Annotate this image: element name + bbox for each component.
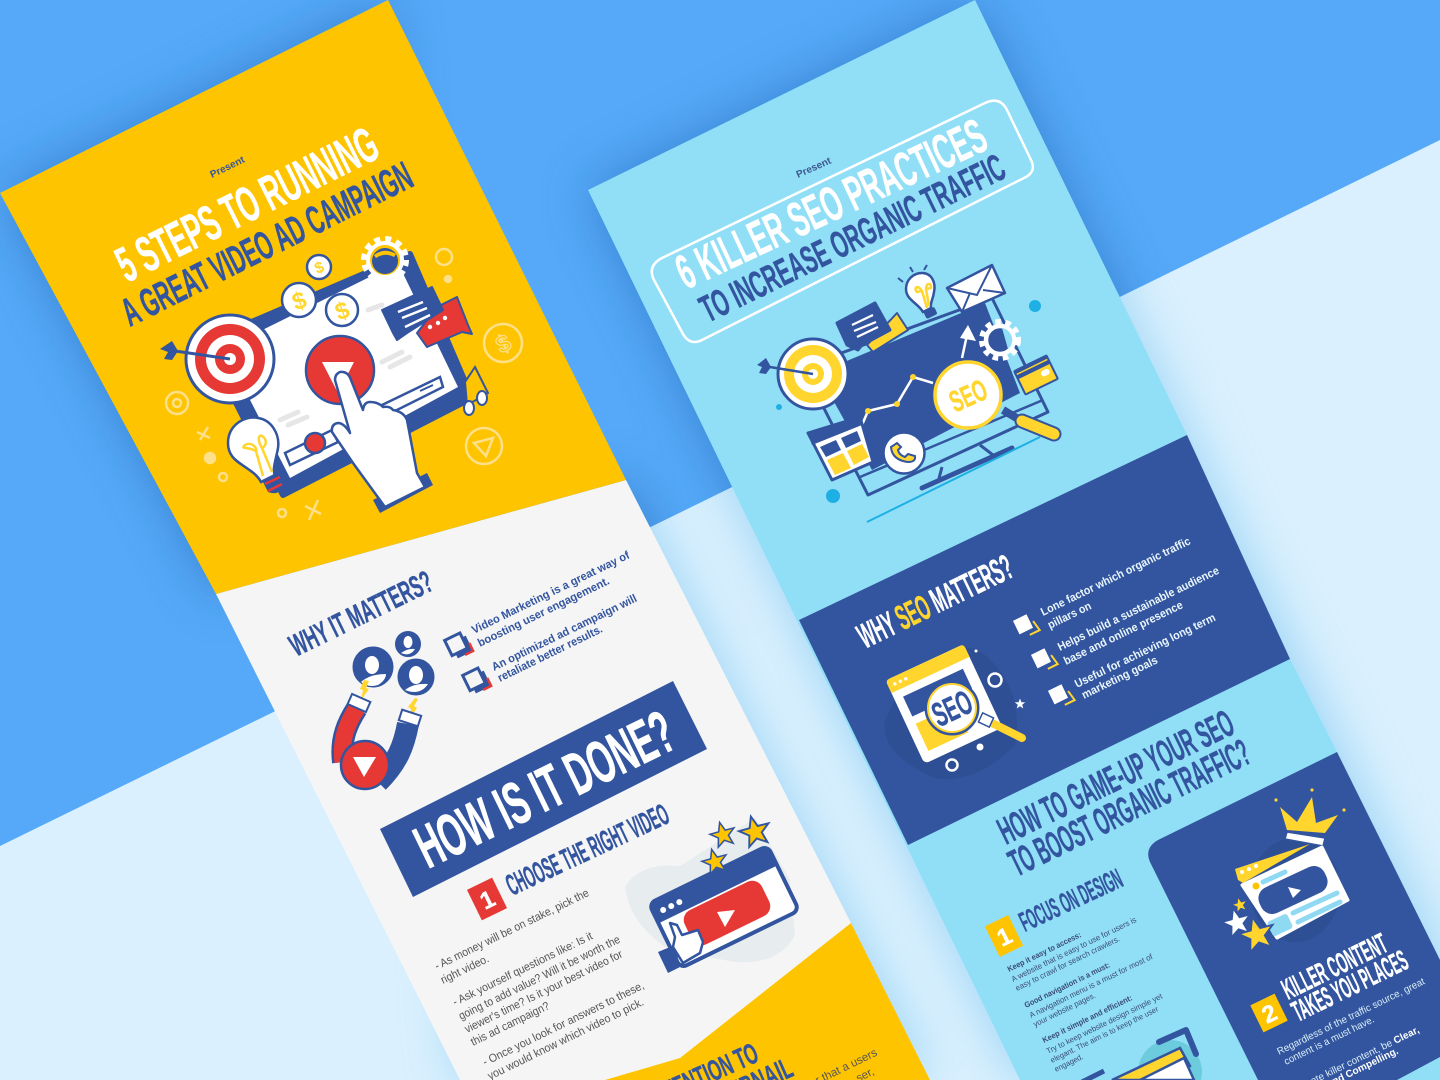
bullet text: Helps build a sustainable audience <box>1056 565 1221 654</box>
banner: how is it done <box>380 681 707 897</box>
icon: phone <box>884 432 924 474</box>
decorative dots <box>776 300 1041 503</box>
icon: video window <box>1235 844 1348 938</box>
icon: gear <box>982 322 1018 358</box>
title line 1: 5 STEPS TO RUNNING <box>107 116 387 293</box>
step 1 body text: - Ask yourself questions like: Is it <box>451 930 595 1009</box>
icon: music note <box>464 367 488 415</box>
bullet text <box>1039 535 1221 702</box>
icon: light bulb <box>898 265 938 319</box>
step 2 number: 2 <box>1258 999 1282 1029</box>
title line 2: A GREAT VIDEO AD CAMPAIGN <box>114 154 420 335</box>
icon: dollar coins: $ <box>332 296 354 326</box>
panel: SEO infographic <box>588 0 1440 1080</box>
title frame and text <box>652 101 1033 342</box>
step 1 body text: Keep it easy to access: <box>1006 930 1083 974</box>
bullet icons <box>1013 612 1075 709</box>
bullet text: Lone factor which organic traffic <box>1039 535 1193 619</box>
illustration: grey placeholder dashes <box>280 305 410 425</box>
label: present: Present <box>208 154 247 181</box>
icon: crown <box>1274 788 1346 846</box>
icon: gear <box>364 239 406 281</box>
step 1 body text: engaged. <box>1053 1052 1085 1074</box>
heading: how to game-up <box>992 703 1257 885</box>
bullet text: boosting user engagement. <box>476 575 612 650</box>
illustration: SEO monitor <box>803 298 1048 522</box>
step 1 body text: - As money will be on stake, pick the <box>433 887 591 973</box>
panel body: light grey sheet <box>216 480 930 1080</box>
panel: yellow header <box>0 0 626 594</box>
bullets: why it matters <box>445 550 639 695</box>
panel body: light blue sheet <box>588 0 1440 1080</box>
icon: pointing hand <box>332 372 433 513</box>
panel: yellow lower section <box>605 923 930 1080</box>
step 1 number: 1 <box>993 922 1017 952</box>
bullet text <box>470 550 639 685</box>
heading: WHY SEO MATTERS? <box>851 547 1020 656</box>
icon: SEO magnifier <box>935 362 1054 434</box>
icon: envelope <box>947 265 1005 312</box>
icon: layout window <box>808 416 873 480</box>
section: why SEO matters <box>799 435 1290 845</box>
step 1 body text: your website pages. <box>1032 991 1097 1029</box>
step 2 body text: Regardless of the traffic source, great <box>1275 976 1427 1058</box>
bullet text: pillars on <box>1046 600 1094 632</box>
step 1 body text: elegant. The aim is to keep the user <box>1049 1004 1160 1065</box>
blob behind window <box>1250 838 1340 942</box>
title line 2: TO INCREASE ORGANIC TRAFFIC <box>694 147 1012 331</box>
step 2 number <box>1250 994 1288 1032</box>
step 1 body text: easy to crawl for search crawlers. <box>1014 934 1121 993</box>
icon: chat bubbles <box>382 287 472 347</box>
bullet text: An optimized ad campaign will <box>490 593 639 674</box>
illustration: video monitor <box>205 254 472 495</box>
icon: rated video window <box>625 813 799 973</box>
icon: dollar coins: $ <box>312 259 327 278</box>
icon: search field <box>382 377 443 415</box>
step 1 body text: A website that is easy to use for users is <box>1010 915 1138 984</box>
heading: why it matters: WHY IT MATTERS? <box>284 564 438 663</box>
step 1 body text: you would know which video to pick. <box>486 997 646 1080</box>
step 1 number: 1 <box>476 885 500 915</box>
step 1 body text <box>1006 915 1165 1074</box>
illustration: faint background icons <box>166 249 522 520</box>
step 1 body text: Try to keep website design simple yet <box>1045 991 1165 1056</box>
icon: target with arrow <box>757 339 848 409</box>
icon: SEO browser window <box>885 644 1025 779</box>
panel: video ad infographic <box>0 0 930 1080</box>
panel: video ad infographic: CHOOSE THE RIGHT VIDEO <box>501 798 674 902</box>
step 2 body text: content is a must have. <box>1282 1014 1376 1068</box>
icon: credit card <box>1013 354 1059 396</box>
icon: SEO browser window: SEO <box>926 683 979 735</box>
chart line on monitor <box>862 374 933 425</box>
icon: target with arrow <box>160 315 274 403</box>
bullet icon 1 <box>445 631 473 660</box>
icon: SEO magnifier: SEO <box>945 374 993 419</box>
step 1 body text: this ad campaign? <box>469 1000 552 1049</box>
icon: play button <box>306 336 374 404</box>
step 2 heading <box>608 1038 798 1080</box>
arrow: upward trend <box>960 325 976 358</box>
step 1 body text: viewer's time? Is it your best video for <box>463 949 625 1036</box>
step 1 body text: A navigation menu is a must for most of <box>1028 952 1155 1020</box>
icon: dollar coins <box>282 255 358 326</box>
icon: magnet pulling play button <box>341 680 421 789</box>
bullet text: marketing goals <box>1080 655 1160 702</box>
step 2 heading <box>1277 928 1413 1028</box>
step 1 body text: going to add value? Will it be worth the <box>457 934 622 1023</box>
bullet text: base and online presence <box>1062 599 1185 668</box>
icon: design window, cut off <box>1082 1030 1202 1080</box>
bullet text: Video Marketing is a great way of <box>470 550 632 637</box>
card: killer content <box>1148 752 1440 1080</box>
step 1 body text: Good navigation is a must: <box>1023 961 1111 1010</box>
step 1 body text: right video. <box>439 953 491 987</box>
bullet text: retaliate better results. <box>496 623 605 685</box>
banner: how is it done: HOW IS IT DONE? <box>404 698 685 881</box>
icon: progress slider <box>285 430 338 465</box>
bullet icon 2 <box>463 666 491 695</box>
icon: stars <box>1219 895 1278 954</box>
icon: dollar coins: $ <box>289 286 311 316</box>
illustration: faint background icons: $ <box>492 329 516 359</box>
panel: SEO infographic: FOCUS ON DESIGN <box>1014 863 1127 937</box>
bullet text: Useful for achieving long term <box>1073 612 1218 691</box>
icon: light bulb <box>228 417 284 493</box>
icon: people avatars <box>353 632 434 695</box>
step 1 number <box>985 915 1023 957</box>
step 1 body text: Keep it simple and efficient: <box>1041 993 1134 1045</box>
step 1 number <box>467 878 507 920</box>
icon: chat bubbles <box>837 303 908 352</box>
step 1 body text <box>433 887 646 1080</box>
step 1 body text: - Once you look for answers to these, <box>481 980 646 1069</box>
label: present: Present <box>795 155 834 181</box>
